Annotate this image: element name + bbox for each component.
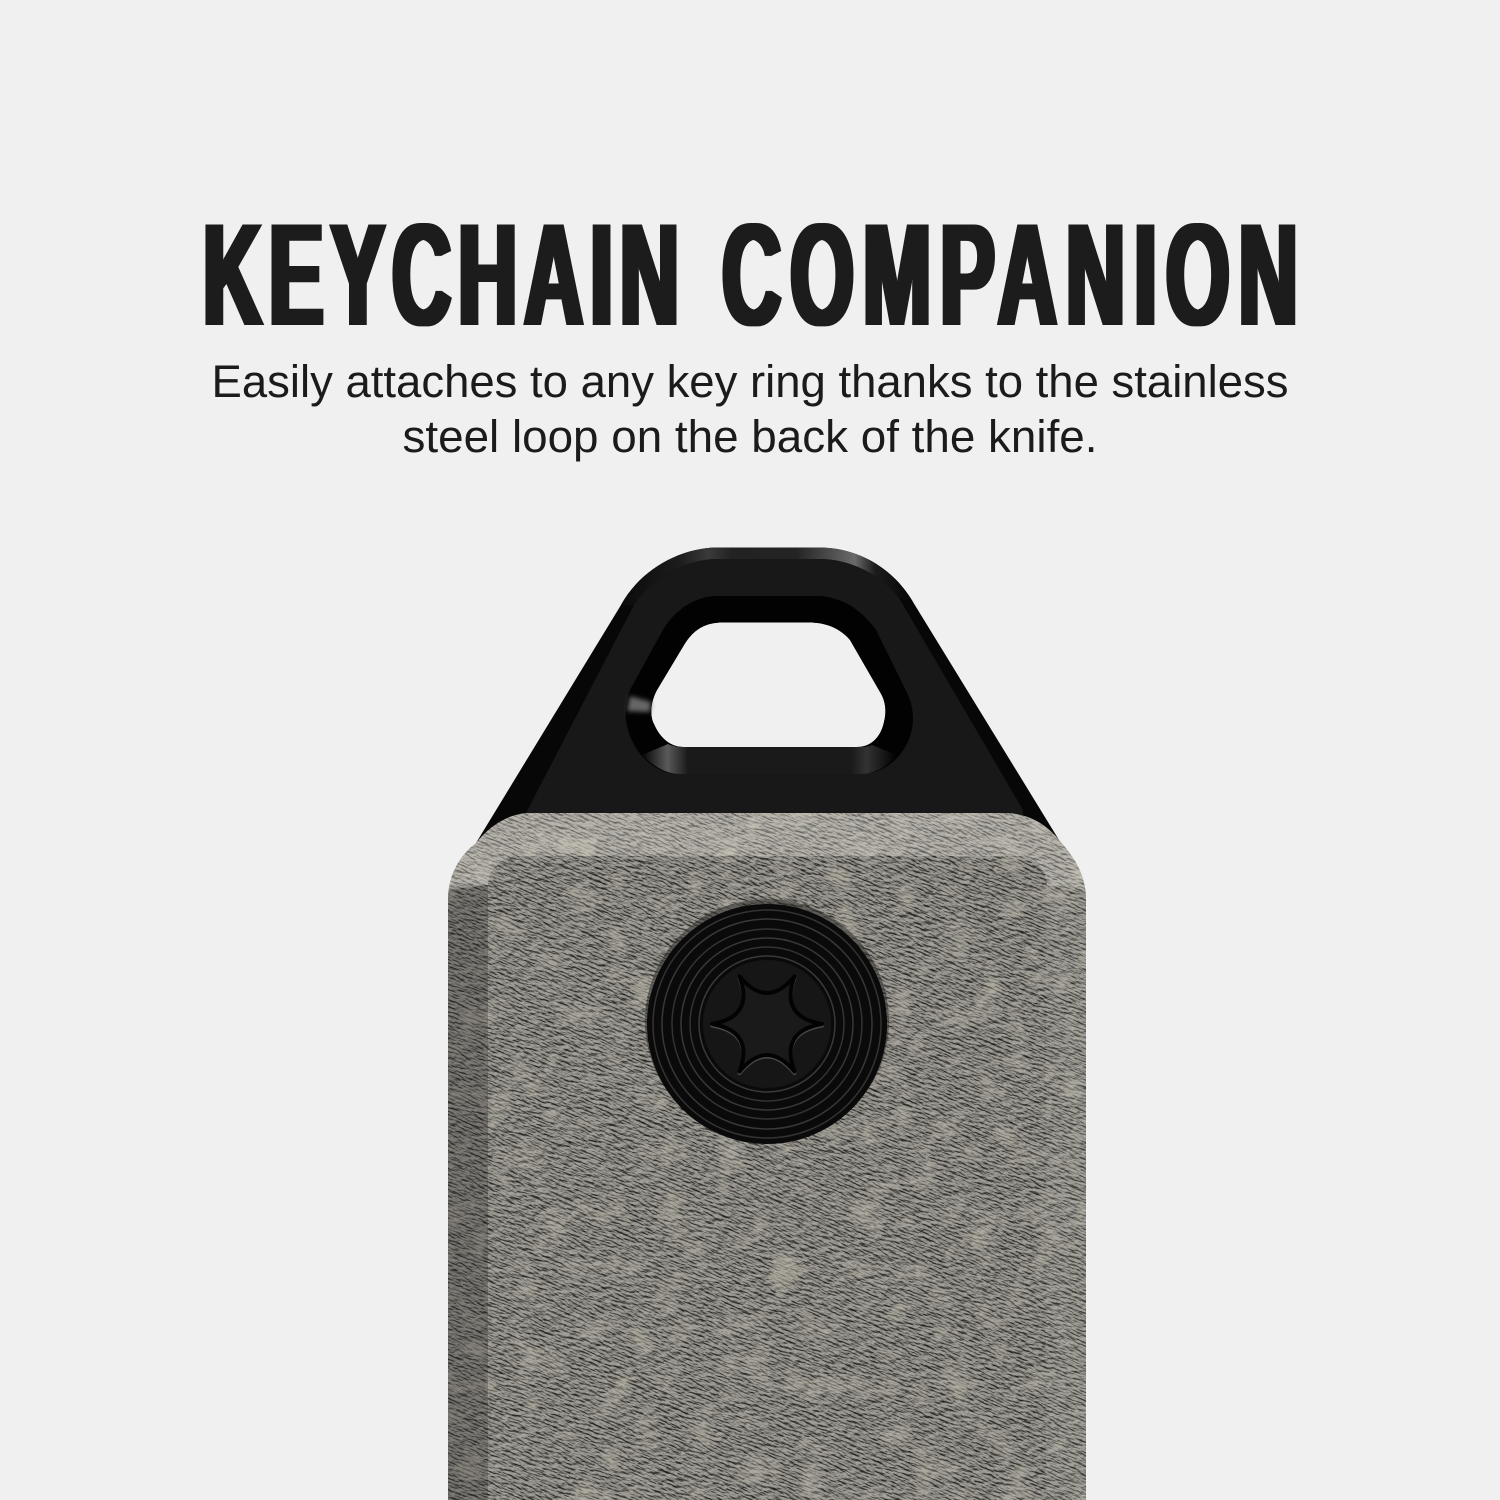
screw recess shadow bbox=[645, 899, 889, 1143]
screw flat centre bbox=[703, 960, 831, 1088]
stone grain bbox=[450, 833, 1084, 1467]
torx socket highlight bbox=[712, 978, 822, 1073]
title bbox=[203, 194, 1307, 357]
torx socket bbox=[712, 976, 822, 1072]
title: COMPANION bbox=[722, 194, 1307, 357]
bevel bottom highlight bbox=[642, 744, 897, 774]
title: KEYCHAIN bbox=[203, 194, 686, 357]
icon: black torx screw bbox=[645, 899, 889, 1144]
pale blotches bbox=[448, 813, 1086, 1500]
recessed hole bevel bbox=[626, 596, 913, 774]
icon: black steel key loop bbox=[476, 548, 1059, 880]
right bevel bbox=[1046, 885, 1086, 1500]
loop front face bbox=[526, 559, 1023, 860]
left bevel bbox=[448, 885, 488, 1500]
subtitle text block: steel loop on the back of the knife. bbox=[402, 411, 1098, 462]
top bevel bbox=[448, 813, 1086, 890]
screw head bbox=[647, 904, 887, 1144]
loop outer edge bbox=[476, 548, 1059, 880]
top rim highlight bbox=[621, 548, 913, 605]
concentric rings bbox=[653, 910, 881, 1138]
bevel left highlight bbox=[627, 696, 651, 712]
subtitle text block bbox=[212, 356, 1288, 462]
panel: textured titanium handle bbox=[448, 813, 1086, 1500]
subtitle text block: Easily attaches to any key ring thanks to the stainless bbox=[212, 356, 1288, 407]
